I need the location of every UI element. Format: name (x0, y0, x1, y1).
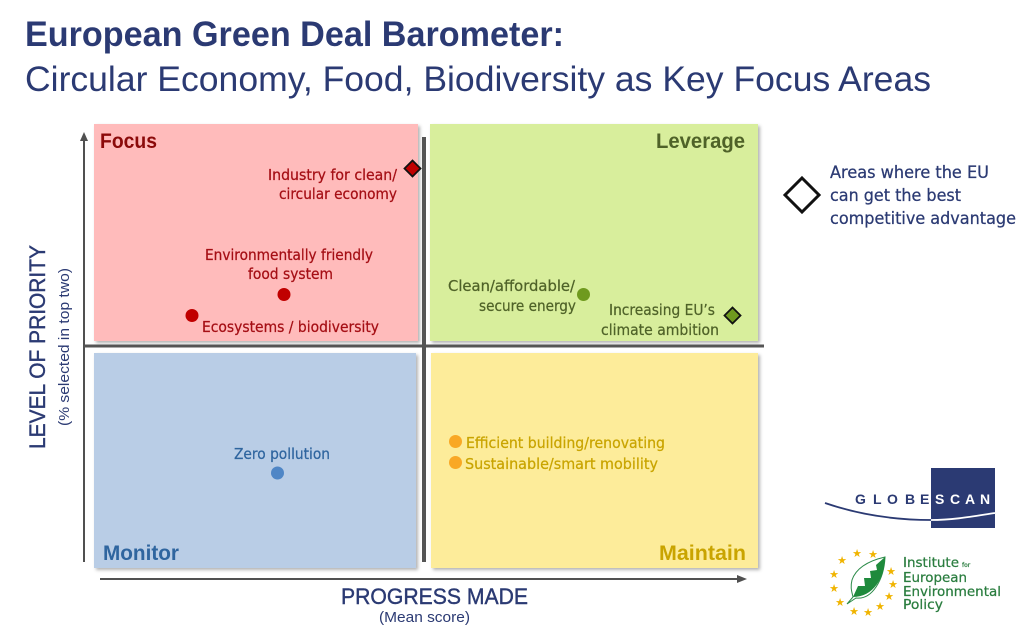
vertical divider (422, 137, 426, 562)
title: European Green Deal Barometer: (25, 14, 564, 54)
item: climate ambition: climate ambition (601, 321, 719, 339)
icon: ring of stars: ★ (837, 555, 847, 567)
y axis sublabel: (% selected in top two) (56, 268, 73, 426)
heading: monitor: Monitor (103, 541, 180, 565)
title (25, 14, 931, 99)
item: food system: Environmentally friendly (205, 246, 373, 264)
icon: ring of stars: ★ (875, 601, 885, 613)
legend text: can get the best (830, 186, 962, 205)
item: food system: food system (248, 265, 333, 283)
logo text: for (962, 562, 971, 569)
horizontal divider (84, 344, 764, 348)
item: food system (205, 246, 373, 301)
item: biodiversity: Ecosystems / biodiversity (202, 318, 379, 336)
item: zero pollution (234, 445, 330, 480)
item: biodiversity (186, 309, 379, 336)
icon: leaf (847, 557, 885, 604)
y axis label: LEVEL OF PRIORITY (25, 245, 50, 449)
icon: ring of stars: ★ (849, 606, 859, 618)
panel: leverage (430, 124, 758, 341)
panel: focus (94, 124, 418, 341)
legend (785, 163, 1016, 228)
item: industry: circular economy (279, 185, 397, 203)
icon: ring of stars (829, 548, 898, 619)
logo: GlobeScan: GLOBE (855, 491, 929, 507)
item: energy (448, 277, 590, 315)
legend text: competitive advantage (830, 209, 1016, 228)
x axis label: PROGRESS MADE (341, 584, 528, 609)
heading: focus: Focus (100, 129, 157, 153)
item: industry (268, 160, 420, 203)
y axis label (25, 245, 73, 449)
logo text: Environmental (903, 584, 1001, 600)
icon: ring of stars: ★ (829, 569, 839, 581)
logo text: Policy (903, 597, 943, 613)
icon: ring of stars: ★ (884, 591, 894, 603)
panel: monitor (94, 353, 416, 568)
item: zero pollution: Zero pollution (234, 445, 330, 463)
icon: ring of stars: ★ (829, 583, 839, 595)
logo: GlobeScan: SCAN (935, 491, 990, 507)
logo text (903, 555, 1001, 613)
legend text (830, 163, 1016, 228)
logo: GlobeScan (825, 468, 995, 528)
item: energy: secure energy (479, 297, 576, 315)
logo text: Institute (903, 555, 959, 571)
logo text: European (903, 570, 967, 586)
item: energy: Clean/affordable/ (448, 277, 576, 295)
item: industry: Industry for clean/ (268, 166, 398, 184)
icon: ring of stars: ★ (886, 566, 896, 578)
panel: maintain (431, 353, 758, 568)
heading: leverage: Leverage (656, 129, 745, 153)
heading: maintain: Maintain (659, 541, 746, 565)
icon: ring of stars: ★ (868, 549, 878, 561)
item: climate ambition: Increasing EU’s (609, 301, 715, 319)
item: efficient building: Efficient building/renovating (466, 434, 665, 452)
icon: ring of stars: ★ (863, 607, 873, 619)
icon: diamond (785, 178, 819, 212)
icon: ring of stars: ★ (888, 579, 898, 591)
title: Circular Economy, Food, Biodiversity as Key Focus Areas (25, 59, 931, 99)
vertical axis (80, 132, 88, 562)
item: climate ambition (601, 301, 740, 339)
x axis sublabel: (Mean score) (379, 610, 470, 626)
horizontal axis (100, 575, 747, 583)
x axis label (341, 584, 528, 626)
item: mobility: Sustainable/smart mobility (465, 455, 658, 473)
logo: Institute for European Environmental Policy (829, 548, 1001, 619)
icon: ring of stars: ★ (852, 548, 862, 560)
icon: ring of stars: ★ (835, 597, 845, 609)
legend text: Areas where the EU (830, 163, 989, 182)
